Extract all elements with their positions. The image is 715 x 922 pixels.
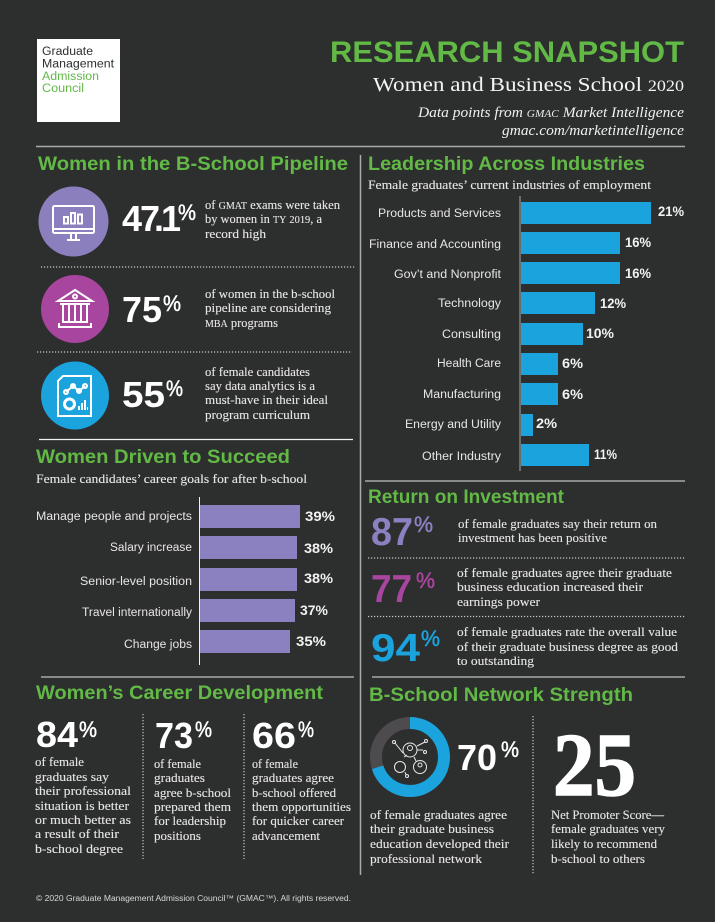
bar chart: career goals: Travel internationally [82, 607, 192, 619]
stat: 84%: 84 [36, 714, 78, 755]
bar chart: industries: Consulting [442, 329, 501, 341]
logo: Council [42, 83, 84, 95]
logo: Admission [42, 71, 99, 83]
bar chart: industries: Finance and Accounting [369, 239, 501, 251]
stat: 66%: for quicker career [252, 814, 345, 828]
stat: 84%: their professional [35, 784, 132, 798]
text: professional network: education developed their [370, 837, 510, 851]
stat: 87%: investment has been positive [458, 531, 607, 545]
stat: 87%: % [414, 512, 433, 537]
stat: 77%: earnings power [457, 595, 541, 609]
bar chart: industries: Energy and Utility [405, 419, 501, 431]
bar chart: industries: Technology [438, 298, 501, 310]
subheading: career goals: Female candidates’ career goals for after b-school [36, 472, 308, 486]
bar chart: career goals: Salary increase [110, 542, 192, 554]
text: gmat exams: of GMAT exams were taken [205, 198, 341, 212]
text: data analytics [205, 365, 329, 422]
chart: 70% donut [376, 723, 444, 791]
stat: 55%: 55 [122, 374, 165, 415]
bar chart: industries: 16% [625, 235, 651, 250]
stat: 75%: % [163, 291, 181, 316]
logo: Management [42, 58, 115, 70]
panel: leadership across industries [368, 153, 684, 471]
stat: 73%: % [195, 717, 212, 742]
logo [37, 39, 120, 122]
stat: 66%: them opportunities [252, 800, 351, 814]
title: RESEARCH SNAPSHOT [330, 36, 684, 69]
bar chart: industries: Products and Services [378, 208, 501, 220]
bar chart: industries: 2% [536, 416, 557, 431]
stat: 77%: 77 [371, 568, 412, 611]
text: mba programs: MBA programs [205, 316, 278, 330]
panel: b-school network strength [369, 684, 666, 875]
text: gmat exams [205, 198, 341, 241]
text: net promoter: likely to recommend [551, 837, 658, 851]
bar chart: career goals: Senior-level position [80, 576, 192, 588]
stat: 77%: of female graduates agree their graduate [457, 566, 672, 580]
text: data analytics: program curriculum [205, 408, 310, 422]
text: professional network: of female graduates agree [370, 808, 507, 822]
text: gmat exams: by women in TY 2019, a [205, 212, 322, 226]
bar chart: industries: Health Care [437, 358, 501, 370]
text: professional network [370, 808, 510, 866]
stat: 84%: of female [35, 755, 84, 769]
bar chart: career goals: 35% [296, 634, 326, 649]
text: professional network: their graduate business [370, 822, 494, 836]
heading: return on investment: Return on Investment [368, 486, 564, 508]
bar chart: industries: 12% [600, 296, 626, 311]
bar chart: career goals: Change jobs [124, 639, 192, 651]
stat: 94%: 94 [371, 627, 420, 670]
stat: 70% [457, 737, 519, 778]
stat: 87%: 87 [371, 511, 413, 554]
stat: 66%: of female [252, 757, 298, 771]
bar chart: industries: 6% [562, 356, 583, 371]
stat: 66% [252, 715, 351, 843]
icon: people network [392, 740, 428, 778]
stat: 77%: % [416, 568, 435, 593]
icon: monitor chart [38, 186, 108, 256]
stat: 87%: of female graduates say their return on [458, 517, 658, 531]
bar chart: industries [369, 196, 684, 471]
heading: pipeline: Women in the B-School Pipeline [38, 153, 348, 175]
stat: 73%: for leadership [154, 814, 226, 828]
stat: 55% [122, 374, 183, 415]
stat: 66%: 66 [252, 715, 296, 756]
text: mba programs: of women in the b-school [205, 287, 336, 301]
subheading: industries: Female graduates’ current industries of employment [368, 178, 652, 192]
panel: women in the b-school pipeline [37, 153, 355, 430]
icon: institution building [41, 275, 109, 343]
bar chart: industries: Other Industry [422, 451, 501, 463]
text: data analytics: say data analytics is a [205, 379, 315, 393]
data source note: Data points from GMAC Market Intelligence [417, 105, 684, 121]
logo: Graduate [42, 46, 93, 58]
icon: data analytics report [41, 362, 109, 430]
stat: 73%: 73 [155, 715, 193, 756]
stat: 94%: % [421, 626, 440, 651]
data source note: gmac.com/marketintelligence [502, 123, 684, 139]
bar chart: career goals: 38% [304, 541, 333, 556]
bar chart: industries: 6% [562, 387, 583, 402]
text: net promoter: b-school to others [551, 852, 645, 866]
stat: 70%: 70 [457, 737, 497, 778]
text: data analytics: of female candidates [205, 365, 310, 379]
stat: 75%: 75 [122, 289, 162, 330]
stat: 87% [371, 511, 658, 554]
stat: 84%: or much better as [35, 813, 131, 827]
heading: driven to succeed: Women Driven to Succeed [36, 446, 290, 468]
stat: 66%: advancement [252, 829, 321, 843]
stat: 94%: of their graduate business degree as good [457, 640, 679, 654]
text: mba programs: pipeline are considering [205, 301, 332, 315]
bar chart: industries: Gov’t and Nonprofit [394, 269, 502, 281]
stat: 75% [122, 289, 181, 330]
stat: 73%: prepared them [154, 800, 231, 814]
stat: 47.1%: % [178, 200, 196, 225]
bar chart: career goals: 38% [304, 571, 333, 586]
stat: 77%: business education increased their [457, 580, 644, 594]
heading: network strength: B-School Network Strength [369, 684, 633, 706]
panel: women's career development [35, 682, 351, 859]
stat: 70%: % [501, 737, 519, 762]
bar chart: career goals [36, 497, 335, 665]
stat: 73%: of female [154, 757, 201, 771]
stat: 66%: % [298, 717, 314, 742]
stat: 84% [35, 714, 132, 856]
stat: 47.1%: 47.1 [122, 198, 181, 239]
stat: 94% [371, 625, 679, 670]
subtitle: Women and Business School 2020 [373, 74, 684, 96]
panel: return on investment [368, 486, 686, 670]
heading: career development: Women’s Career Development [36, 682, 324, 704]
text: data analytics: must-have in their ideal [205, 393, 329, 407]
text: professional network: professional network [370, 852, 483, 866]
text: gmat exams: record high [205, 227, 267, 241]
stat: 77% [371, 566, 672, 611]
bar chart: industries: 16% [625, 266, 651, 281]
panel: women driven to succeed [36, 446, 335, 665]
stat: 66%: graduates agree [252, 771, 334, 785]
stat: 94%: of female graduates rate the overall value [457, 625, 677, 639]
text: mba programs [205, 287, 336, 330]
bar chart: industries: Manufacturing [423, 389, 501, 401]
bar chart: career goals: 39% [305, 509, 335, 524]
stat: net promoter score 25: 25 [553, 716, 636, 815]
bar chart: industries: 11% [594, 447, 617, 462]
text: net promoter: Net Promoter Score— [551, 808, 665, 822]
bar chart: career goals: Manage people and projects [36, 511, 192, 523]
stat: 84%: % [79, 717, 97, 742]
text: net promoter [551, 808, 666, 866]
stat: 55%: % [166, 376, 183, 401]
footer: copyright: © 2020 Graduate Management Admission Council™ (GMAC™). All rights reserved. [36, 894, 351, 903]
bar chart: career goals: 37% [300, 603, 328, 618]
data source note [417, 105, 684, 139]
stat: 73% [154, 715, 232, 843]
stat: 73%: positions [154, 829, 201, 843]
stat: 66%: b-school offered [252, 786, 337, 800]
stat: 84%: graduates say [35, 770, 110, 784]
stat: 73%: agree b-school [154, 786, 232, 800]
stat: 73%: graduates [154, 771, 205, 785]
bar chart: industries: 21% [658, 204, 684, 219]
stat: 84%: a result of their [35, 827, 120, 841]
bar chart: industries: 10% [586, 326, 614, 341]
stat: 84%: b-school degree [35, 842, 123, 856]
heading: leadership: Leadership Across Industries [368, 153, 645, 175]
stat: 84%: situation is better [35, 799, 130, 813]
text: net promoter: female graduates very [551, 822, 666, 836]
stat: 94%: to outstanding [457, 654, 535, 668]
